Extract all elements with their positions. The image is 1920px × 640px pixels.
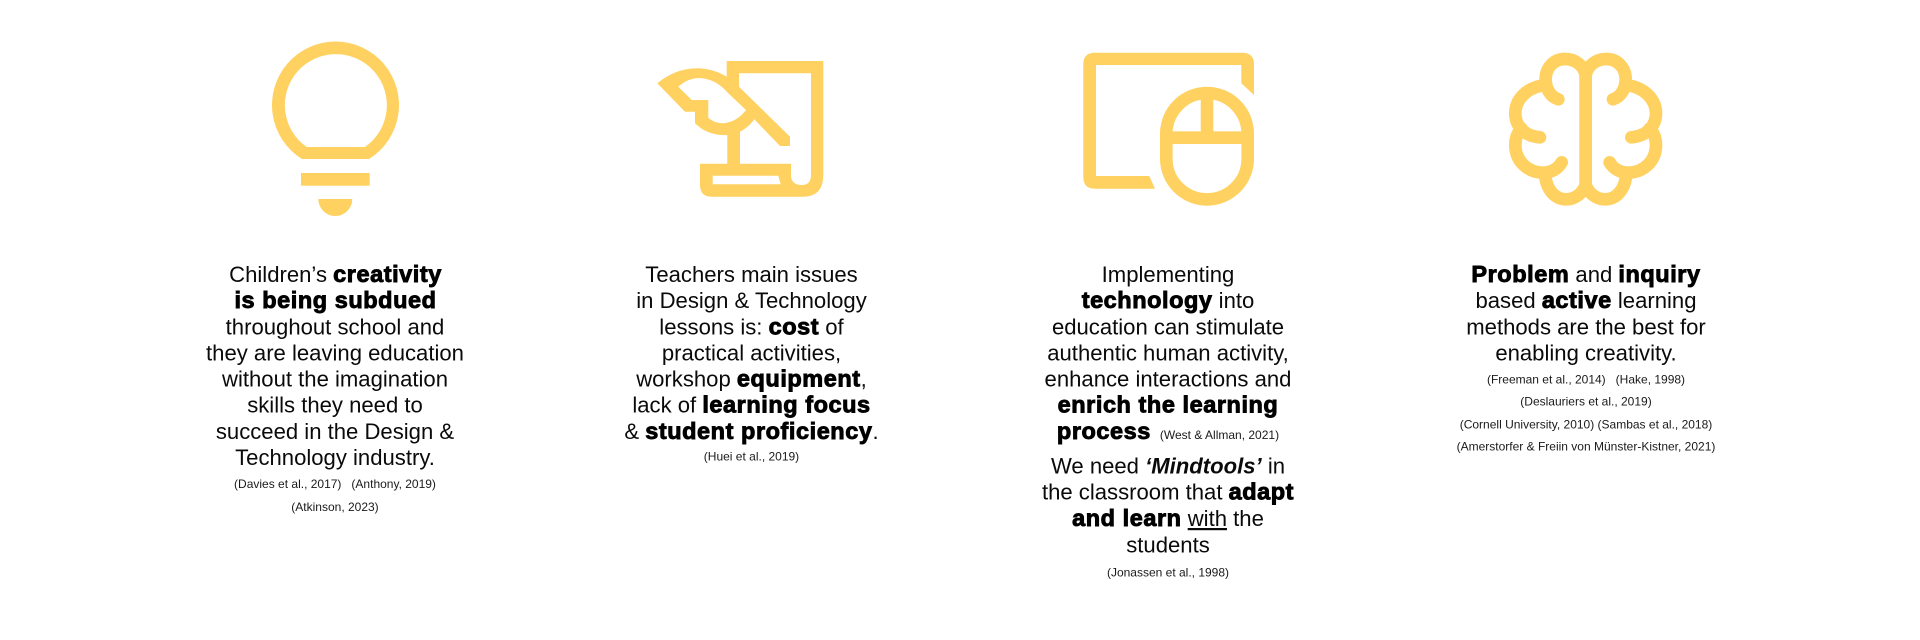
text block: problem and inquiry based learning: Problem and inquiry [1471,261,1701,287]
text block: children's creativity: succeed in the Design & [216,419,454,444]
text block: children's creativity: they are leaving education [206,340,464,366]
icon: light bulb [272,42,399,216]
text block: problem and inquiry based learning: (Cornell University, 2010) (Sambas et al., 2018) [1460,417,1712,431]
text block: problem and inquiry based learning [1457,261,1715,454]
icon: quill and scroll [657,61,823,197]
text block: children's creativity: is being subdued [234,287,437,313]
text block: implementing technology: enrich the learning [1058,392,1278,418]
icon: screen and mouse [1083,53,1254,199]
text block: teachers main issues: & student proficiency. [624,418,879,444]
text block: teachers main issues: lessons is: cost of [659,314,845,340]
text block: implementing technology: Implementing [1102,262,1234,287]
icon: brain [1515,59,1656,199]
text block: children's creativity: throughout school and [226,314,444,340]
text block: implementing technology: (Jonassen et al., 1998) [1107,566,1229,580]
text block: teachers main issues [624,262,879,464]
text block: children's creativity: (Atkinson, 2023) [291,500,379,514]
text block: teachers main issues: practical activities, [662,340,841,366]
text block: implementing technology [1042,262,1294,580]
text block: problem and inquiry based learning: methods are the best for [1466,314,1706,340]
text block: teachers main issues: lack of learning focus [632,392,871,418]
text block: children's creativity: Technology industry. [235,445,435,470]
text block: problem and inquiry based learning: (Deslauriers et al., 2019) [1520,395,1652,409]
text block: implementing technology: technology into [1082,287,1254,313]
text block: children's creativity: skills they need to [247,393,423,418]
text block: problem and inquiry based learning: (Freeman et al., 2014) (Hake, 1998) [1487,372,1685,386]
text block: children's creativity: without the imagination [221,366,448,392]
text block: teachers main issues: Teachers main issues [645,262,858,287]
text block: teachers main issues: in Design & Technology [636,288,867,313]
text block: problem and inquiry based learning: based active learning [1475,287,1697,313]
text block: implementing technology: the classroom that adapt [1042,478,1294,504]
text block: implementing technology: students [1126,532,1210,558]
text block: teachers main issues: (Huei et al., 2019) [704,450,799,464]
text block: children's creativity: Children’s creativity [229,261,442,287]
text block: implementing technology: authentic human activity, [1047,340,1289,366]
text block: implementing technology: process (West & Allman, 2021) [1057,418,1279,444]
text block: implementing technology: education can stimulate [1052,314,1284,340]
text block: children's creativity [206,261,464,514]
text block: problem and inquiry based learning: (Amerstorfer & Freiin von Münster-Kistner, 2021) [1457,440,1715,454]
text block: implementing technology: We need ‘Mindtools’ in [1051,453,1285,478]
text block: implementing technology: enhance interactions and [1045,366,1291,392]
text block: problem and inquiry based learning: enabling creativity. [1495,341,1677,366]
text block: implementing technology: and learn with the [1072,505,1264,531]
text block: teachers main issues: workshop equipment, [635,366,867,392]
text block: children's creativity: (Davies et al., 2017) (Anthony, 2019) [234,477,436,491]
